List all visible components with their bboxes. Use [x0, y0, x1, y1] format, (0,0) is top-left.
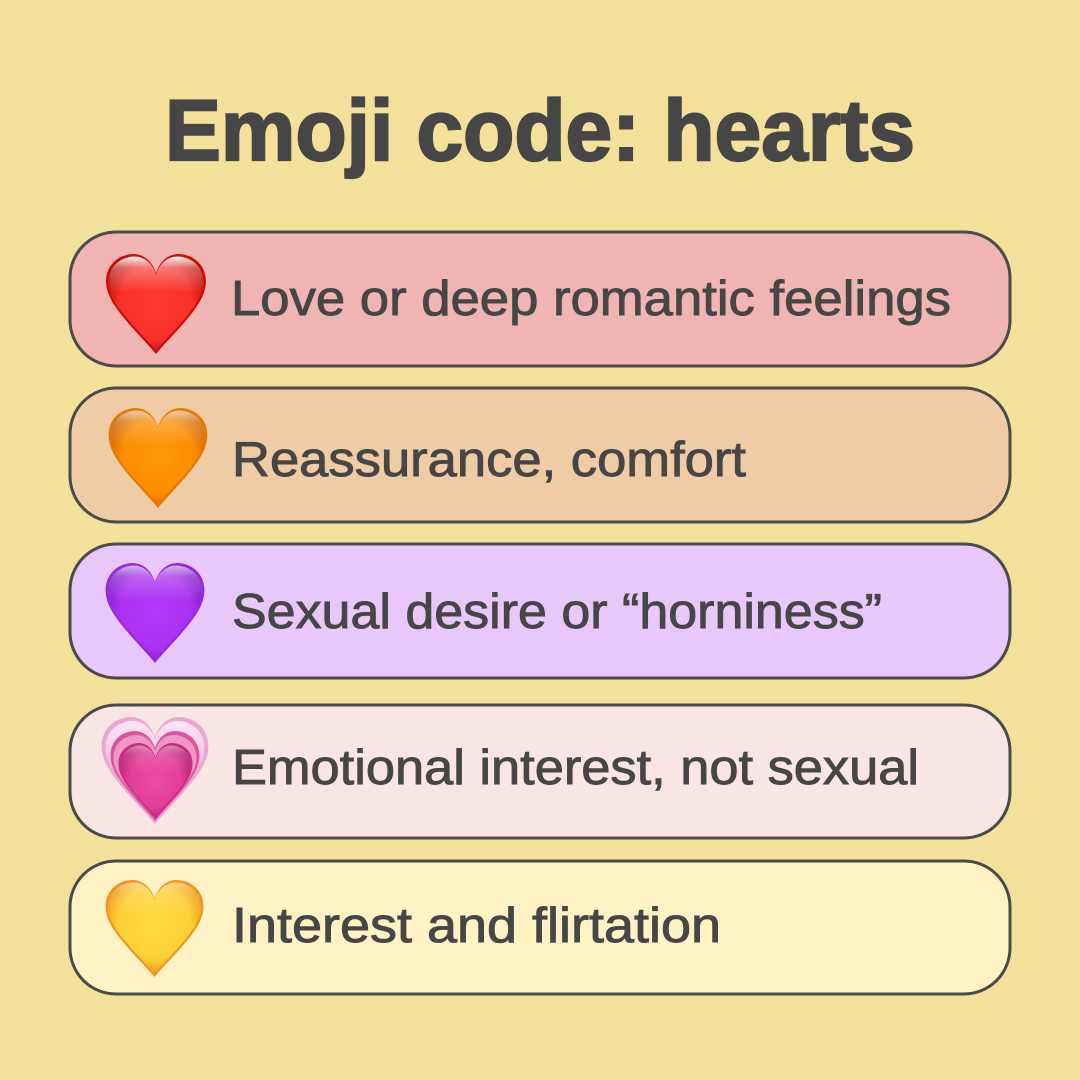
icon: growing heart	[102, 717, 208, 824]
panel: emotional interest	[70, 705, 1010, 838]
icon: yellow heart	[106, 880, 203, 977]
icon: orange heart	[109, 408, 207, 508]
panel: love	[70, 232, 1010, 366]
text: emotional interest: Emotional interest, not sexual	[232, 741, 919, 795]
text: desire: Sexual desire or “horniness”	[232, 585, 882, 639]
text: reassurance: Reassurance, comfort	[232, 433, 746, 487]
panel: flirtation	[70, 861, 1010, 994]
text: flirtation: Interest and flirtation	[232, 899, 721, 953]
icon: red heart	[106, 254, 206, 354]
icon: purple heart	[106, 563, 204, 663]
panel: desire	[70, 544, 1010, 678]
title: Emoji code: hearts	[165, 83, 915, 179]
text: love: Love or deep romantic feelings	[231, 272, 951, 326]
panel: reassurance	[70, 388, 1010, 522]
